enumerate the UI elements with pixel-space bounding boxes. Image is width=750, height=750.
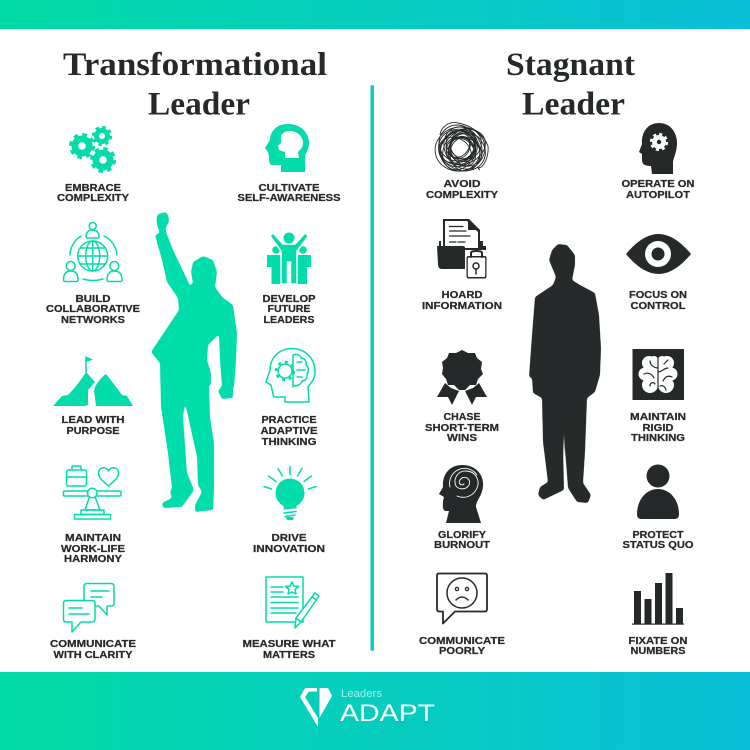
footer bar [0, 672, 750, 750]
label: build collaborative networks: BUILD [76, 293, 111, 305]
heading: stagnant leader [506, 47, 635, 122]
heading: stagnant leader: Stagnant [506, 47, 635, 83]
label: communicate with clarity: WITH CLARITY [54, 649, 132, 661]
label: chase short-term wins: SHORT-TERM [425, 422, 499, 434]
item: operate on autopilot [622, 123, 694, 201]
item: embrace complexity [57, 128, 129, 204]
label: embrace complexity: COMPLEXITY [57, 192, 129, 204]
label: lead with purpose [62, 414, 124, 437]
item: lead with purpose [53, 356, 133, 437]
item: cultivate self-awareness [238, 124, 340, 204]
logo text: adapt: ADAPT [340, 700, 435, 727]
item: maintain work-life harmony [61, 466, 125, 565]
label: fixate on numbers: NUMBERS [630, 645, 686, 657]
heading: transformational leader: Transformational [63, 47, 327, 83]
icon: eye [626, 234, 691, 274]
icon: tangled scribble [432, 120, 492, 178]
item: develop future leaders [262, 232, 316, 326]
icon: document with star and pencil [266, 577, 319, 628]
icon: light bulb [264, 466, 316, 520]
label: maintain rigid thinking [630, 411, 686, 444]
icon: balance scale with briefcase and heart [64, 466, 121, 519]
label: fixate on numbers: FIXATE ON [628, 635, 688, 647]
icon: mountains with flag [53, 356, 133, 406]
label: measure what matters: MEASURE WHAT [242, 638, 336, 650]
label: cultivate self-awareness: CULTIVATE [258, 182, 320, 194]
logo: leaders adapt [300, 688, 435, 727]
item: measure what matters [242, 577, 336, 661]
figure: green leader with raised fist [151, 212, 237, 512]
label: glorify burnout: GLORIFY [438, 529, 486, 541]
label: chase short-term wins: CHASE [444, 411, 480, 423]
label: chase short-term wins: WINS [447, 432, 477, 444]
label: practice adaptive thinking: PRACTICE [262, 414, 316, 426]
icon: head with gear brain [266, 348, 315, 402]
icon: gears [71, 128, 114, 171]
heading: stagnant leader: Leader [522, 86, 625, 122]
item: practice adaptive thinking [260, 348, 318, 448]
label: develop future leaders [262, 293, 316, 326]
item: focus on control [626, 234, 691, 312]
label: build collaborative networks [46, 293, 140, 326]
label: practice adaptive thinking [260, 414, 318, 448]
icon: three people arms raised [267, 232, 311, 284]
label: embrace complexity: EMBRACE [65, 182, 121, 194]
label: measure what matters [242, 638, 336, 661]
label: protect status quo [622, 529, 694, 551]
label: communicate poorly [419, 635, 505, 657]
label: fixate on numbers [628, 635, 688, 657]
label: maintain rigid thinking: MAINTAIN [630, 411, 686, 423]
item: glorify burnout [434, 465, 491, 551]
icon: award rosette [437, 350, 487, 405]
label: build collaborative networks: COLLABORATIVE [46, 303, 140, 315]
label: maintain work-life harmony: WORK-LIFE [61, 543, 125, 555]
label: avoid complexity: COMPLEXITY [426, 189, 498, 201]
heading: transformational leader: Leader [148, 86, 250, 122]
label: communicate with clarity [50, 638, 136, 661]
label: maintain rigid thinking: THINKING [631, 432, 685, 444]
label: communicate poorly: POORLY [439, 645, 485, 657]
label: operate on autopilot [622, 178, 694, 201]
label: practice adaptive thinking: ADAPTIVE [260, 425, 318, 437]
icon: chat bubbles [64, 584, 114, 632]
label: focus on control: CONTROL [630, 300, 686, 312]
centre divider line [370, 85, 374, 651]
label: drive innovation: INNOVATION [253, 543, 325, 555]
label: measure what matters: MATTERS [263, 649, 315, 661]
label: practice adaptive thinking: THINKING [262, 436, 316, 448]
label: glorify burnout [434, 529, 491, 551]
label: maintain work-life harmony: MAINTAIN [65, 532, 121, 544]
item: build collaborative networks [46, 222, 140, 326]
label: maintain work-life harmony [61, 532, 125, 565]
label: develop future leaders: LEADERS [264, 314, 314, 326]
label: hoard information: HOARD [442, 289, 483, 301]
label: focus on control: FOCUS ON [629, 289, 687, 301]
panel: stagnant leader [419, 47, 694, 657]
label: lead with purpose: LEAD WITH [62, 414, 124, 426]
label: lead with purpose: PURPOSE [66, 425, 120, 437]
panel: transformational leader [46, 47, 340, 661]
icon: sad face speech bubble [437, 574, 487, 624]
icon: bar chart [632, 573, 684, 625]
label: cultivate self-awareness: SELF-AWARENESS [238, 192, 340, 204]
label: hoard information: INFORMATION [422, 300, 502, 312]
label: drive innovation [253, 532, 325, 555]
icon: brain in dark square [632, 349, 684, 400]
label: protect status quo: STATUS QUO [622, 539, 694, 551]
label: cultivate self-awareness [238, 182, 340, 204]
icon: person bust [637, 464, 679, 519]
label: glorify burnout: BURNOUT [434, 539, 491, 551]
label: develop future leaders: DEVELOP [262, 293, 316, 305]
item: communicate with clarity [50, 584, 136, 661]
label: develop future leaders: FUTURE [268, 303, 310, 315]
logo text: leaders: Leaders [341, 688, 383, 700]
item: maintain rigid thinking [630, 349, 686, 444]
item: communicate poorly [419, 574, 505, 657]
label: protect status quo: PROTECT [632, 529, 684, 541]
label: focus on control [629, 289, 687, 312]
label: operate on autopilot: OPERATE ON [622, 178, 694, 190]
label: build collaborative networks: NETWORKS [61, 314, 125, 326]
icon: globe network [64, 222, 122, 282]
label: maintain rigid thinking: RIGID [642, 422, 674, 434]
label: chase short-term wins [425, 411, 499, 444]
label: avoid complexity: AVOID [444, 178, 481, 190]
item: chase short-term wins [425, 350, 499, 444]
label: hoard information [422, 289, 502, 312]
label: operate on autopilot: AUTOPILOT [626, 189, 691, 201]
icon: diamond logo mark [300, 688, 332, 727]
item: drive innovation [253, 466, 325, 555]
item: hoard information [422, 219, 502, 312]
label: communicate poorly: COMMUNICATE [419, 635, 505, 647]
icon: head outline solid [265, 124, 309, 172]
icon: locked file folder [437, 219, 487, 278]
figure: dark standing leader [529, 244, 601, 503]
icon: head with gear [639, 123, 677, 174]
icon: head with spiral [439, 465, 483, 523]
label: drive innovation: DRIVE [272, 532, 306, 544]
top gradient bar [0, 0, 750, 29]
item: protect status quo [622, 464, 694, 551]
label: embrace complexity [57, 182, 129, 204]
label: maintain work-life harmony: HARMONY [64, 553, 122, 565]
heading: transformational leader [63, 47, 327, 122]
item: fixate on numbers [628, 573, 688, 657]
label: communicate with clarity: COMMUNICATE [50, 638, 136, 650]
item: avoid complexity [426, 120, 498, 201]
label: avoid complexity [426, 178, 498, 201]
